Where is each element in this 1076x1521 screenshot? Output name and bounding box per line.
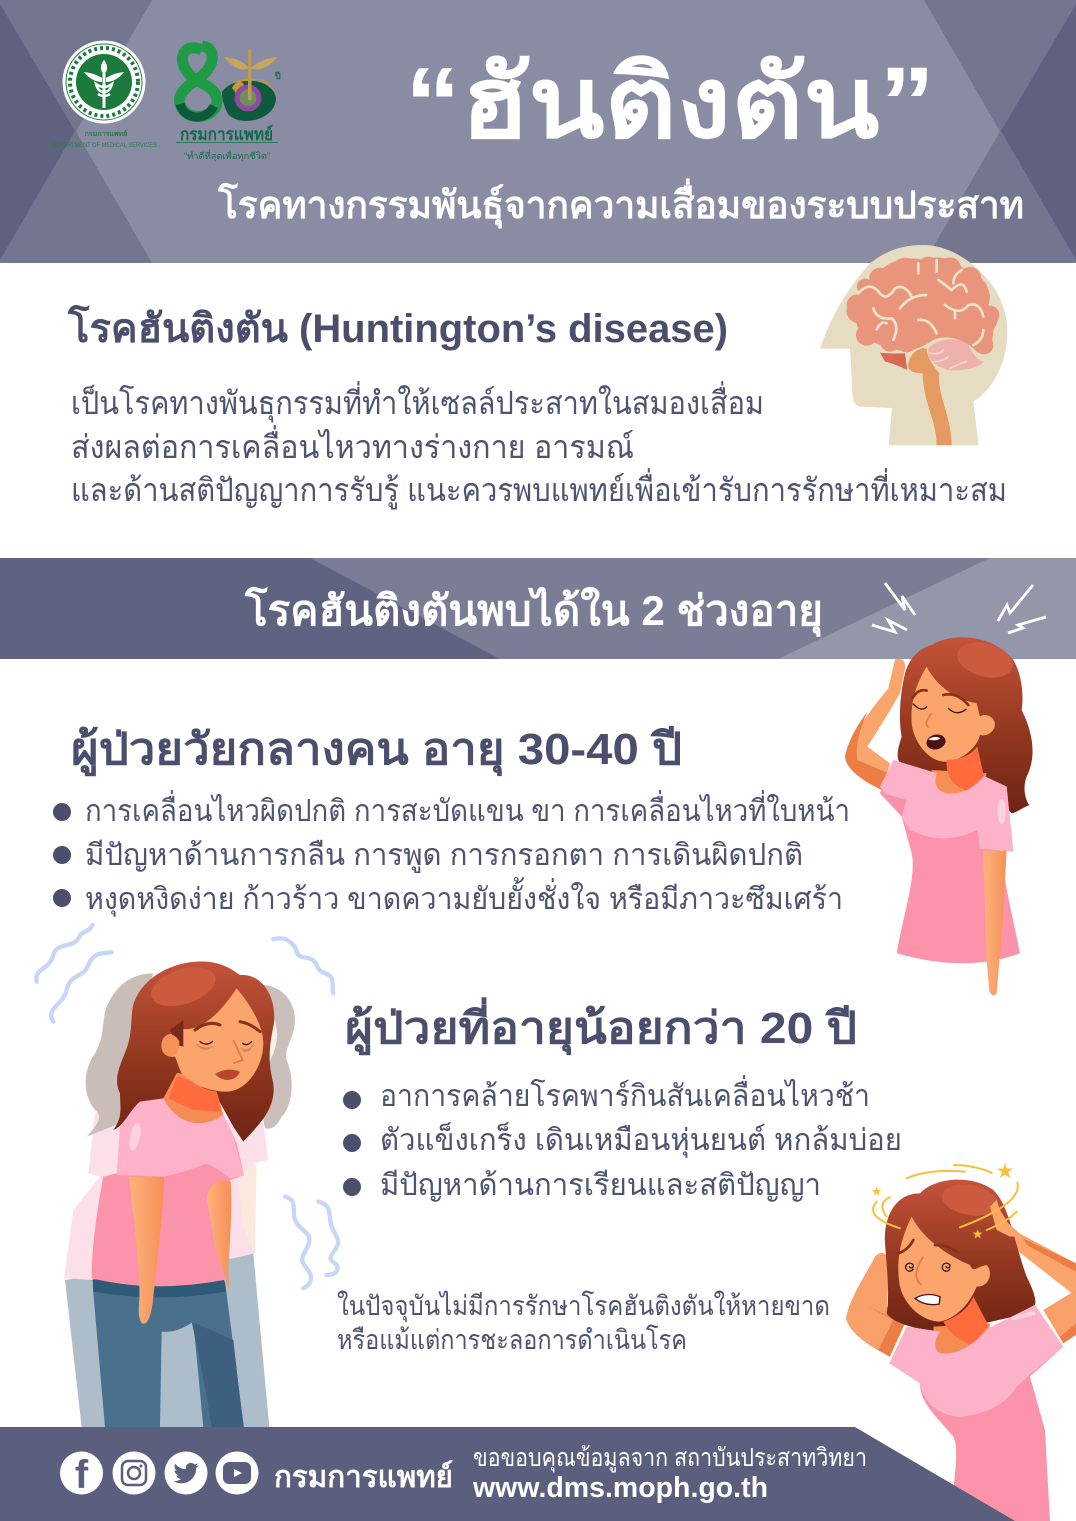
logo caption: department of medical services: DEPARTMENT OF MEDICAL SERVICES bbox=[52, 143, 157, 149]
icon: youtube bbox=[216, 1452, 258, 1494]
icon: 80th anniversary logo bbox=[179, 46, 281, 121]
title: “ฮันติงตัน” bbox=[405, 47, 935, 159]
subtitle: โรคทางกรรมพันธุ์จากความเสื่อมของระบบประสาท bbox=[217, 178, 1024, 229]
icon: twitter bbox=[164, 1452, 208, 1494]
hanging arms bbox=[129, 1177, 164, 1324]
symptom list: ตัวแข็งเกร็ง เดินเหมือนหุ่นยนต์ หกล้มบ่อย bbox=[380, 1121, 902, 1159]
logo caption: กรมการแพทย์: กรมการแพทย์ bbox=[180, 124, 273, 144]
heading: middle age: ผู้ป่วยวัยกลางคน อายุ 30-40 ปี bbox=[71, 725, 682, 777]
illustration: dizzy woman bbox=[846, 1163, 1076, 1521]
symptom list: มีปัญหาด้านการกลืน การพูด การกรอกตา การเดินผิดปกติ bbox=[85, 839, 803, 873]
website: www.dms.moph.go.th bbox=[472, 1472, 768, 1504]
logo caption: department of medical services bbox=[52, 129, 157, 149]
face bbox=[161, 988, 263, 1092]
illustration: swaying woman bbox=[36, 925, 338, 1427]
icon: lightning marks bbox=[872, 583, 1046, 633]
tremor lines bbox=[36, 925, 338, 1288]
credit line: ขอขอบคุณข้อมูลจาก สถาบันประสาทวิทยา bbox=[473, 1444, 867, 1473]
icon: 80th anniversary logo: ปี bbox=[274, 71, 281, 81]
intro heading: โรคฮันติงตัน (Huntington’s disease) bbox=[67, 305, 728, 351]
logo caption: department of medical services: กรมการแพทย์ bbox=[85, 129, 127, 138]
symptom list: หงุดหงิดง่าย ก้าวร้าว ขาดความยับยั้งชั่งใจ หรือมีภาวะซึมเศร้า bbox=[85, 877, 843, 918]
logo caption: กรมการแพทย์: “ทำดีที่สุดเพื่อทุกชีวิต” bbox=[184, 149, 270, 162]
intro paragraph: ส่งผลต่อการเคลื่อนไหวทางร่างกาย อารมณ์ bbox=[71, 425, 634, 465]
illustration: woman with headache bbox=[845, 637, 1033, 995]
jeans bbox=[93, 1282, 244, 1427]
treatment note: ในปัจจุบันไม่มีการรักษาโรคฮันติงตันให้หายขาด bbox=[337, 1290, 830, 1323]
section: patients under 20 bbox=[343, 997, 902, 1202]
intro paragraph: เป็นโรคทางพันธุกรรมที่ทำให้เซลล์ประสาทในสมองเสื่อม bbox=[71, 381, 764, 423]
hair bbox=[113, 961, 274, 1142]
ghost figure bbox=[64, 973, 295, 1427]
treatment note: หรือแม้แต่การชะลอการดำเนินโรค bbox=[337, 1325, 687, 1355]
section: middle-aged patients bbox=[53, 725, 850, 918]
footer band bbox=[0, 1427, 1015, 1521]
intro paragraph: และด้านสติปัญญาการรับรู้ แนะควรพบแพทย์เพื่อเข้ารับการรักษาที่เหมาะสม bbox=[71, 468, 1007, 510]
icon: facebook: f bbox=[75, 1453, 89, 1497]
shirt bbox=[92, 1098, 244, 1286]
footer brand: กรมการแพทย์ bbox=[274, 1460, 453, 1494]
heading: under 20: ผู้ป่วยที่อายุน้อยกว่า 20 ปี bbox=[345, 997, 857, 1056]
illustration: head with brain bbox=[820, 245, 1007, 445]
header band bbox=[0, 0, 1076, 263]
icon: ministry of public health logo bbox=[62, 40, 146, 124]
symptom list: อาการคล้ายโรคพาร์กินสันเคลื่อนไหวช้า bbox=[380, 1075, 870, 1113]
icon: instagram bbox=[112, 1452, 156, 1494]
symptom list bbox=[343, 1075, 902, 1202]
logo caption: กรมการแพทย์ bbox=[176, 124, 278, 162]
age band bbox=[0, 558, 1076, 659]
treatment note bbox=[337, 1290, 830, 1355]
symptom list: การเคลื่อนไหวผิดปกติ การสะบัดแขน ขา การเคลื่อนไหวที่ใบหน้า bbox=[85, 790, 850, 828]
symptom list: มีปัญหาด้านการเรียนและสติปัญญา bbox=[380, 1169, 821, 1202]
band heading: โรคฮันติงตันพบได้ใน 2 ช่วงอายุ bbox=[244, 586, 823, 637]
icon: facebook bbox=[60, 1452, 103, 1497]
symptom list bbox=[53, 790, 850, 918]
intro paragraph bbox=[71, 381, 1007, 510]
